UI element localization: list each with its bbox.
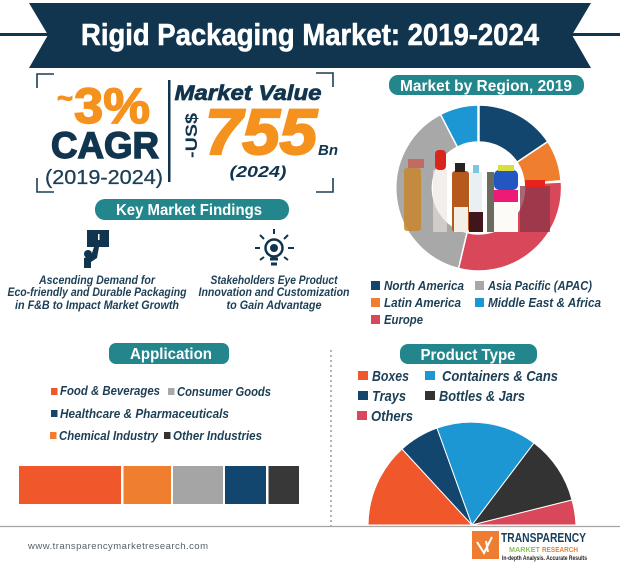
legend: product type: Containers & Cans bbox=[442, 368, 558, 385]
legend: market by region bbox=[371, 278, 601, 327]
logo: transparency market research: TRANSPARENCY bbox=[501, 530, 586, 545]
legend: application: Chemical Industry bbox=[59, 428, 159, 443]
text: finding two: to Gain Advantage bbox=[226, 300, 322, 312]
semi-circle chart: product type bbox=[368, 422, 576, 525]
heading: key market findings bbox=[95, 199, 289, 220]
logo: transparency market research: MARKET bbox=[509, 545, 540, 554]
CAGR period: (2019-2024) bbox=[45, 167, 163, 189]
title banner bbox=[0, 3, 620, 68]
legend: application: Food & Beverages bbox=[60, 383, 160, 398]
CAGR percentage: ~ bbox=[57, 82, 73, 115]
billion unit: Bn bbox=[318, 142, 338, 159]
legend: product type bbox=[357, 368, 558, 425]
legend: application: Consumer Goods bbox=[177, 384, 271, 399]
legend: market by region: Middle East & Africa bbox=[488, 295, 601, 310]
text: finding one bbox=[8, 275, 186, 312]
text: finding two bbox=[198, 275, 350, 312]
text: finding one: in F&B to Impact Market Growth bbox=[15, 300, 179, 312]
heading: market by region: Market by Region, 2019 bbox=[400, 78, 572, 95]
heading: application bbox=[109, 343, 229, 364]
icon: person holding sign bbox=[84, 230, 109, 268]
legend: application: Healthcare & Pharmaceuticals bbox=[60, 406, 229, 421]
CAGR label: CAGR bbox=[51, 125, 159, 166]
text: finding two: Innovation and Customization bbox=[198, 287, 350, 299]
donut chart: market by region bbox=[396, 105, 562, 271]
logo: transparency market research bbox=[472, 530, 587, 562]
legend: application: Other Industries bbox=[173, 428, 262, 443]
market value number: 755 bbox=[205, 96, 318, 168]
legend: product type: Boxes bbox=[372, 368, 409, 385]
title banner: Rigid Packaging Market: 2019-2024 bbox=[81, 17, 540, 52]
panel: headline statistics bbox=[37, 73, 338, 192]
legend: product type: Others bbox=[371, 408, 413, 425]
legend: product type: Bottles & Jars bbox=[439, 388, 525, 405]
website url: www.transparencymarketresearch.com bbox=[27, 541, 208, 552]
legend: application bbox=[50, 383, 271, 443]
legend: market by region: Latin America bbox=[384, 295, 461, 310]
icon: light bulb bbox=[255, 229, 294, 264]
market value year: (2024) bbox=[230, 164, 286, 181]
heading: application: Application bbox=[130, 346, 212, 363]
market value label: Market Value bbox=[174, 82, 322, 105]
logo: transparency market research: RESEARCH bbox=[542, 545, 578, 554]
legend: market by region: Asia Pacific (APAC) bbox=[487, 278, 592, 293]
text: finding one: Ascending Demand for bbox=[38, 275, 155, 287]
text: finding two: Stakeholders Eye Product bbox=[210, 275, 339, 287]
heading: key market findings: Key Market Findings bbox=[116, 202, 262, 219]
heading: product type bbox=[400, 344, 537, 364]
currency label: -US$ bbox=[182, 112, 201, 158]
legend: market by region: North America bbox=[384, 278, 464, 293]
heading: product type: Product Type bbox=[420, 347, 516, 364]
legend: product type: Trays bbox=[372, 388, 406, 405]
logo: transparency market research: In-depth Analysis. Accurate Results bbox=[502, 555, 587, 562]
text: finding one: Eco-friendly and Durable Packaging bbox=[8, 287, 186, 299]
legend: market by region: Europe bbox=[384, 312, 423, 327]
image: packaging bottles bbox=[404, 150, 550, 232]
CAGR percentage: 3% bbox=[74, 78, 150, 134]
stacked bar: application bbox=[19, 466, 299, 504]
